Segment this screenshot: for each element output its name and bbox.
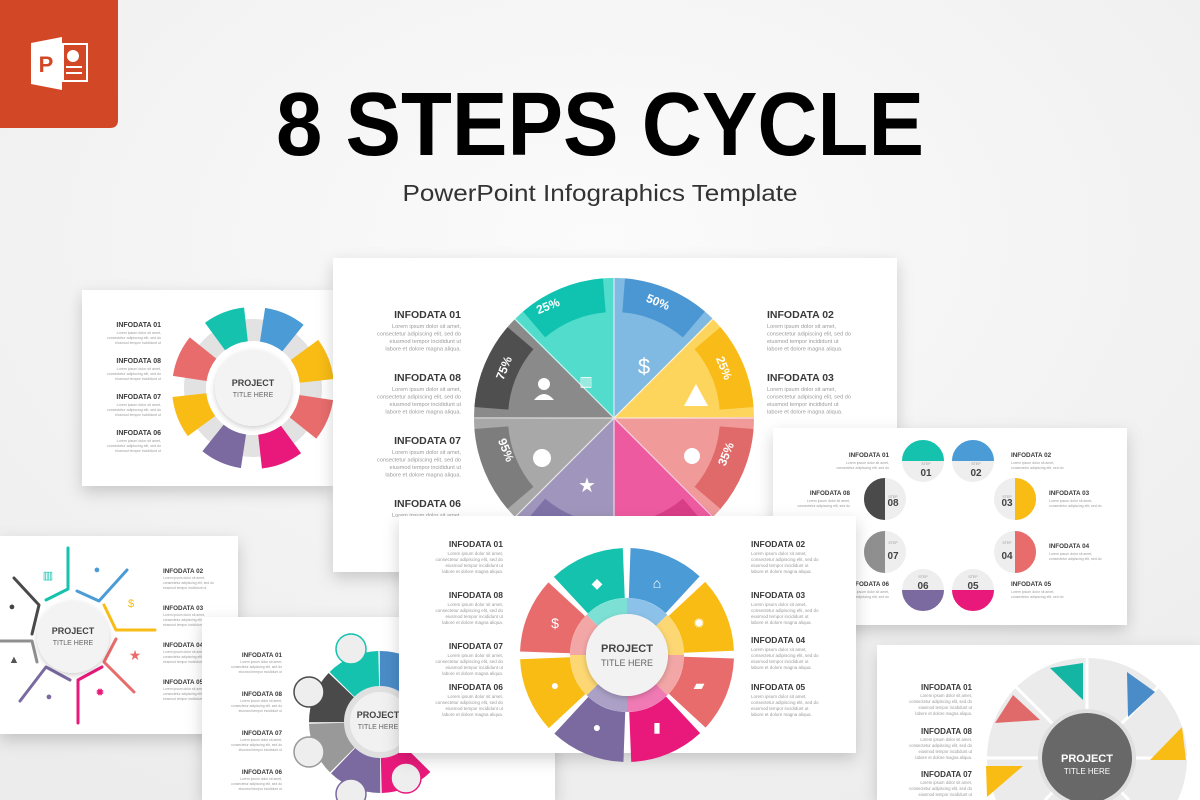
labels: radial slide: consectetur adipiscing elit, sed do [163,581,214,585]
title: 8 STEPS CYCLE [276,75,924,175]
labels: bottom right slide [909,683,973,797]
labels: ring slide: consectetur adipiscing elit, sed do [231,665,282,669]
slide: step circles: consectetur adipiscing elit, sed do [1011,595,1064,599]
labels: front slide right: INFODATA 05 [751,682,805,692]
slide: ring with icon circles [202,617,555,800]
slide: step circles: Lorem ipsum dolor sit amet, [1049,552,1092,556]
labels: big slide: eiusmod tempor incididunt ut [389,339,461,345]
slide: step circles: 06 [917,581,929,592]
labels: slide 1: eiusmod tempor incididunt ut [115,413,161,417]
slide: bottom right semicircle [877,645,1200,800]
labels: bottom right slide: consectetur adipiscing elit, sed do [909,743,973,748]
labels: step slide: INFODATA 08 [810,490,850,497]
labels: radial slide: consectetur adipiscing elit, sed do [163,692,214,696]
labels: front slide right: eiusmod tempor incididunt ut [751,563,809,568]
labels: front slide right: labore et dolore magna aliqua. [751,712,812,717]
labels: front slide left: consectetur adipiscing elit, sed do [435,659,503,664]
labels: bottom right slide: Lorem ipsum dolor sit amet, [920,693,972,698]
ring diagram: TITLE HERE [358,724,399,731]
wheel: front slide: TITLE HERE [601,658,653,668]
subtitle: PowerPoint Infographics Template [402,180,798,206]
labels: ring slide: Lorem ipsum dolor sit amet, [240,777,282,781]
labels: slide 1: Lorem ipsum dolor sit amet, [117,439,161,443]
wheel: front slide: ● [551,677,559,693]
labels: bottom right slide: eiusmod tempor incididunt ut [918,792,973,797]
labels: ring slide: consectetur adipiscing elit, sed do [231,704,282,708]
labels: slide 1 [107,322,161,453]
labels: big slide: consectetur adipiscing elit, sed do [377,332,461,338]
wheel: front slide: ▮ [653,719,661,735]
wheel: front slide: ◆ [592,575,603,591]
step circles [864,440,1036,611]
pie chart: big wheel: 50% [644,291,672,313]
wheel: front slide: PROJECT [601,643,653,655]
labels: step slide: Lorem ipsum dolor sit amet, [807,499,850,503]
pie chart: big wheel: ▥ [579,373,593,389]
slide: big pie wheel: consectetur adipiscing elit, sed do [767,332,851,338]
slide: step circles: Lorem ipsum dolor sit amet, [1049,499,1092,503]
labels: front slide left: eiusmod tempor incididunt ut [445,563,504,568]
labels: slide 1: INFODATA 08 [116,358,161,365]
labels: front slide right: Lorem ipsum dolor sit amet, [751,694,807,699]
labels: radial slide: Lorem ipsum dolor sit amet, [163,687,205,691]
labels: front slide right: consectetur adipiscing elit, sed do [751,608,819,613]
labels: ring slide: INFODATA 01 [242,652,282,659]
labels: step slide: Lorem ipsum dolor sit amet, [846,590,889,594]
labels: big slide: Lorem ipsum dolor sit amet, [392,387,461,393]
labels: step slide: consectetur adipiscing elit, sed do [836,595,889,599]
semicircle diagram: TITLE HERE [1064,767,1110,776]
logo: powerpoint [0,0,118,128]
labels: front slide right: INFODATA 02 [751,539,805,549]
slide: step circles: 01 [920,468,932,479]
labels: front slide right: eiusmod tempor incididunt ut [751,706,809,711]
slide: step circles: consectetur adipiscing elit, sed do [1049,504,1102,508]
labels: front slide left: eiusmod tempor incididunt ut [445,614,504,619]
wheel: slide 1 [172,308,333,468]
slide: big pie wheel: Lorem ipsum dolor sit amet, [767,324,836,330]
labels: front slide left: Lorem ipsum dolor sit amet, [447,694,503,699]
slide: step circles: consectetur adipiscing elit, sed do [1011,466,1064,470]
slide: step circles: 02 [970,468,982,479]
labels: front slide left: eiusmod tempor incididunt ut [445,706,504,711]
labels: big slide: labore et dolore magna aliqua. [385,472,461,478]
slide: big pie wheel: INFODATA 02 [767,309,834,321]
slide: step circles: 07 [887,551,899,562]
labels: big slide: Lorem ipsum dolor sit amet, [392,450,461,456]
labels: big slide [377,309,461,519]
labels: bottom right slide: consectetur adipiscing elit, sed do [909,699,973,704]
slide: step circles: STEP [921,462,931,466]
labels: radial slide: INFODATA 04 [163,642,204,649]
labels: radial slide: Lorem ipsum dolor sit amet, [163,613,205,617]
wheel: front slide: $ [551,615,559,631]
labels: big slide: labore et dolore magna aliqua. [385,410,461,416]
labels: front slide right: INFODATA 04 [751,635,805,645]
labels: bottom right slide: labore et dolore magna aliqua. [915,755,972,760]
labels: big slide: INFODATA 07 [394,435,461,447]
pie chart: big wheel: $ [638,354,650,379]
labels: slide 1: Lorem ipsum dolor sit amet, [117,331,161,335]
slide: radial lines: TITLE HERE [53,640,94,647]
labels: slide 1: eiusmod tempor incididunt ut [115,341,161,345]
labels: radial slide: eiusmod tempor incididunt ut [163,586,206,590]
wheel: front slide: ✹ [693,615,705,631]
labels: front slide right: labore et dolore magna aliqua. [751,665,812,670]
semicircle diagram [986,658,1187,800]
wheel: slide 1: PROJECT [232,378,275,388]
labels: big slide: labore et dolore magna aliqua. [385,346,461,352]
labels: big slide: Lorem ipsum dolor sit amet, [392,513,461,519]
labels: front slide left: consectetur adipiscing elit, sed do [435,557,503,562]
labels: ring slide: eiusmod tempor incididunt ut [239,670,282,674]
labels: front slide left: INFODATA 08 [449,590,503,600]
labels: front slide right: Lorem ipsum dolor sit amet, [751,647,807,652]
labels: front slide left: consectetur adipiscing elit, sed do [435,608,503,613]
pie chart: big wheel: 35% [715,440,737,468]
labels: ring slide: eiusmod tempor incididunt ut [239,787,282,791]
pie chart: big wheel: 25% [534,295,562,317]
slide: step circles: STEP [888,495,898,499]
slide: step circles: INFODATA 02 [1011,452,1052,459]
slide: step circles: consectetur adipiscing elit, sed do [1049,557,1102,561]
labels: front slide right: consectetur adipiscing elit, sed do [751,700,819,705]
labels: step slide [797,452,889,599]
labels: front slide left: eiusmod tempor incididunt ut [445,665,504,670]
labels: front slide right: Lorem ipsum dolor sit amet, [751,602,807,607]
labels: front slide left: INFODATA 06 [449,682,503,692]
labels: step slide: consectetur adipiscing elit, sed do [797,504,850,508]
labels: front slide left: INFODATA 01 [449,539,503,549]
wheel: front slide: ▰ [694,677,705,693]
labels: slide 1: Lorem ipsum dolor sit amet, [117,403,161,407]
labels: big slide: consectetur adipiscing elit, sed do [377,394,461,400]
pie chart: big wheel: 95% [495,436,517,464]
labels: radial slide: consectetur adipiscing elit, sed do [163,655,214,659]
labels: radial slide: eiusmod tempor incididunt ut [163,660,206,664]
labels: front slide right [751,539,819,717]
labels: bottom right slide: INFODATA 01 [921,683,973,692]
radial diagram [0,548,155,723]
labels: slide 1: INFODATA 07 [116,394,161,401]
labels: slide 1: INFODATA 06 [116,430,161,437]
pie chart: big wheel: ★ [578,475,596,497]
pie chart: big wheel: 25% [713,354,735,382]
slide: big pie wheel [333,245,897,591]
labels: front slide right: INFODATA 03 [751,590,805,600]
slide: step circles: INFODATA 05 [1011,581,1052,588]
labels: radial slide [163,568,214,701]
labels: bottom right slide: eiusmod tempor incididunt ut [918,749,973,754]
labels: front slide left: Lorem ipsum dolor sit amet, [447,653,503,658]
labels: front slide right: consectetur adipiscing elit, sed do [751,557,819,562]
labels: bottom right slide: INFODATA 07 [921,770,973,779]
labels: slide 1: consectetur adipiscing elit, sed do [107,336,161,340]
slide: step circles: INFODATA 04 [1049,543,1090,550]
pie chart: big wheel [474,278,754,516]
slide: step circles: STEP [971,462,981,466]
slide: radial lines: ● [94,564,100,576]
labels: big slide: INFODATA 08 [394,372,461,384]
labels: front slide right: consectetur adipiscing elit, sed do [751,653,819,658]
labels: front slide right: labore et dolore magna aliqua. [751,569,812,574]
labels: slide 1: Lorem ipsum dolor sit amet, [117,367,161,371]
slide: big pie wheel: eiusmod tempor incididunt ut [767,339,839,345]
slide: step circles: 04 [1001,551,1013,562]
slide: step circles: INFODATA 03 [1049,490,1090,497]
slide: big pie wheel: eiusmod tempor incididunt ut [767,402,839,408]
labels: front slide left: labore et dolore magna aliqua. [442,620,503,625]
slide: step circles: Lorem ipsum dolor sit amet, [1011,461,1054,465]
slide: step circles: Lorem ipsum dolor sit amet, [1011,590,1054,594]
labels: big slide: consectetur adipiscing elit, sed do [377,458,461,464]
labels: slide 1: eiusmod tempor incididunt ut [115,377,161,381]
slide: step circles: 08 [887,498,899,509]
slide: step circles: STEP [918,575,928,579]
labels: front slide left: labore et dolore magna aliqua. [442,569,503,574]
slide: big pie wheel: labore et dolore magna aliqua. [767,410,843,416]
labels: radial slide: Lorem ipsum dolor sit amet, [163,576,205,580]
labels: front slide left: Lorem ipsum dolor sit amet, [447,602,503,607]
slide: radial lines: ● [9,601,15,613]
labels: big slide: INFODATA 01 [394,309,461,321]
labels: front slide right: eiusmod tempor incididunt ut [751,614,809,619]
labels: big slide: eiusmod tempor incididunt ut [389,465,461,471]
labels: slide 1: INFODATA 01 [116,322,161,329]
slide: center front wheel [399,516,856,771]
slide: radial lines: $ [128,598,134,610]
labels: front slide left: labore et dolore magna aliqua. [442,671,503,676]
labels: slide 1: consectetur adipiscing elit, sed do [107,408,161,412]
pie chart: big wheel: 75% [493,354,515,382]
slide: radial lines: ★ [129,647,141,663]
wheel: front slide: ● [593,719,601,735]
labels: big slide: Lorem ipsum dolor sit amet, [392,324,461,330]
slide: radial lines [0,536,238,734]
slide: step circles: STEP [888,541,898,545]
semicircle diagram: PROJECT [1061,753,1113,765]
labels: step slide: INFODATA 01 [849,452,889,459]
labels: ring slide: eiusmod tempor incididunt ut [239,709,282,713]
slide: big pie wheel: labore et dolore magna aliqua. [767,346,843,352]
slide: big pie wheel: Lorem ipsum dolor sit amet, [767,387,836,393]
labels: radial slide: eiusmod tempor incididunt ut [163,623,206,627]
labels: front slide right: labore et dolore magna aliqua. [751,620,812,625]
labels: step slide: Lorem ipsum dolor sit amet, [846,461,889,465]
labels: front slide left: consectetur adipiscing elit, sed do [435,700,503,705]
labels: radial slide: INFODATA 02 [163,568,204,575]
labels: slide 1: consectetur adipiscing elit, sed do [107,444,161,448]
labels: big slide: eiusmod tempor incididunt ut [389,402,461,408]
labels: ring slide: Lorem ipsum dolor sit amet, [240,699,282,703]
labels: radial slide: INFODATA 05 [163,679,204,686]
labels: ring slide: INFODATA 08 [242,691,282,698]
labels: step slide: consectetur adipiscing elit, sed do [836,466,889,470]
slide: step circles: 03 [1001,498,1013,509]
labels: step slide: Lorem ipsum dolor sit amet, [807,552,850,556]
slide: step circles [773,428,1127,625]
labels: bottom right slide: labore et dolore magna aliqua. [915,711,972,716]
labels: ring slide: INFODATA 06 [242,769,282,776]
wheel: front slide [520,548,734,762]
labels: radial slide: consectetur adipiscing elit, sed do [163,618,214,622]
labels: slide 1: consectetur adipiscing elit, sed do [107,372,161,376]
ring diagram [309,651,430,793]
labels: radial slide: INFODATA 03 [163,605,204,612]
labels: ring slide: Lorem ipsum dolor sit amet, [240,738,282,742]
labels: ring slide [231,652,282,791]
slide: step circles: STEP [1002,495,1012,499]
labels: bottom right slide: consectetur adipiscing elit, sed do [909,786,973,791]
labels: bottom right slide: Lorem ipsum dolor sit amet, [920,780,972,785]
labels: radial slide: eiusmod tempor incididunt ut [163,697,206,701]
slide: radial lines: PROJECT [52,626,95,636]
labels: slide 1: eiusmod tempor incididunt ut [115,449,161,453]
labels: ring slide: Lorem ipsum dolor sit amet, [240,660,282,664]
labels: step slide: consectetur adipiscing elit, sed do [797,557,850,561]
labels: ring slide: INFODATA 07 [242,730,282,737]
labels: bottom right slide: INFODATA 08 [921,727,973,736]
slide: left arrow-ring wheel [82,290,342,486]
labels: bottom right slide: Lorem ipsum dolor sit amet, [920,737,972,742]
labels: front slide left: INFODATA 07 [449,641,503,651]
labels: ring slide: eiusmod tempor incididunt ut [239,748,282,752]
labels: ring slide: consectetur adipiscing elit, sed do [231,782,282,786]
labels: front slide left: Lorem ipsum dolor sit amet, [447,551,503,556]
slide: radial lines: ✹ [95,687,105,699]
labels: big slide: INFODATA 06 [394,498,461,510]
slide: step circles: STEP [1002,541,1012,545]
labels: front slide right: Lorem ipsum dolor sit amet, [751,551,807,556]
labels: step slide: INFODATA 07 [810,543,850,550]
labels: bottom right slide: eiusmod tempor incididunt ut [918,705,973,710]
labels: radial slide: Lorem ipsum dolor sit amet, [163,650,205,654]
labels: step slide: INFODATA 06 [849,581,889,588]
slide: radial lines: ▲ [9,654,19,666]
labels: front slide left [435,539,504,717]
logo: powerpoint: P [39,52,53,77]
wheel: slide 1: TITLE HERE [233,392,274,399]
slide: big pie wheel: consectetur adipiscing elit, sed do [767,394,851,400]
labels: front slide right: eiusmod tempor incididunt ut [751,659,809,664]
labels: ring slide: consectetur adipiscing elit, sed do [231,743,282,747]
ring diagram: PROJECT [357,710,400,720]
slide: big pie wheel: INFODATA 03 [767,372,834,384]
slide: step circles: 05 [967,581,979,592]
labels: front slide left: labore et dolore magna aliqua. [442,712,503,717]
slide: step circles: STEP [968,575,978,579]
wheel: front slide: ⌂ [653,575,661,591]
slide: radial lines: ● [46,691,52,703]
slide: radial lines: ▥ [43,570,53,582]
